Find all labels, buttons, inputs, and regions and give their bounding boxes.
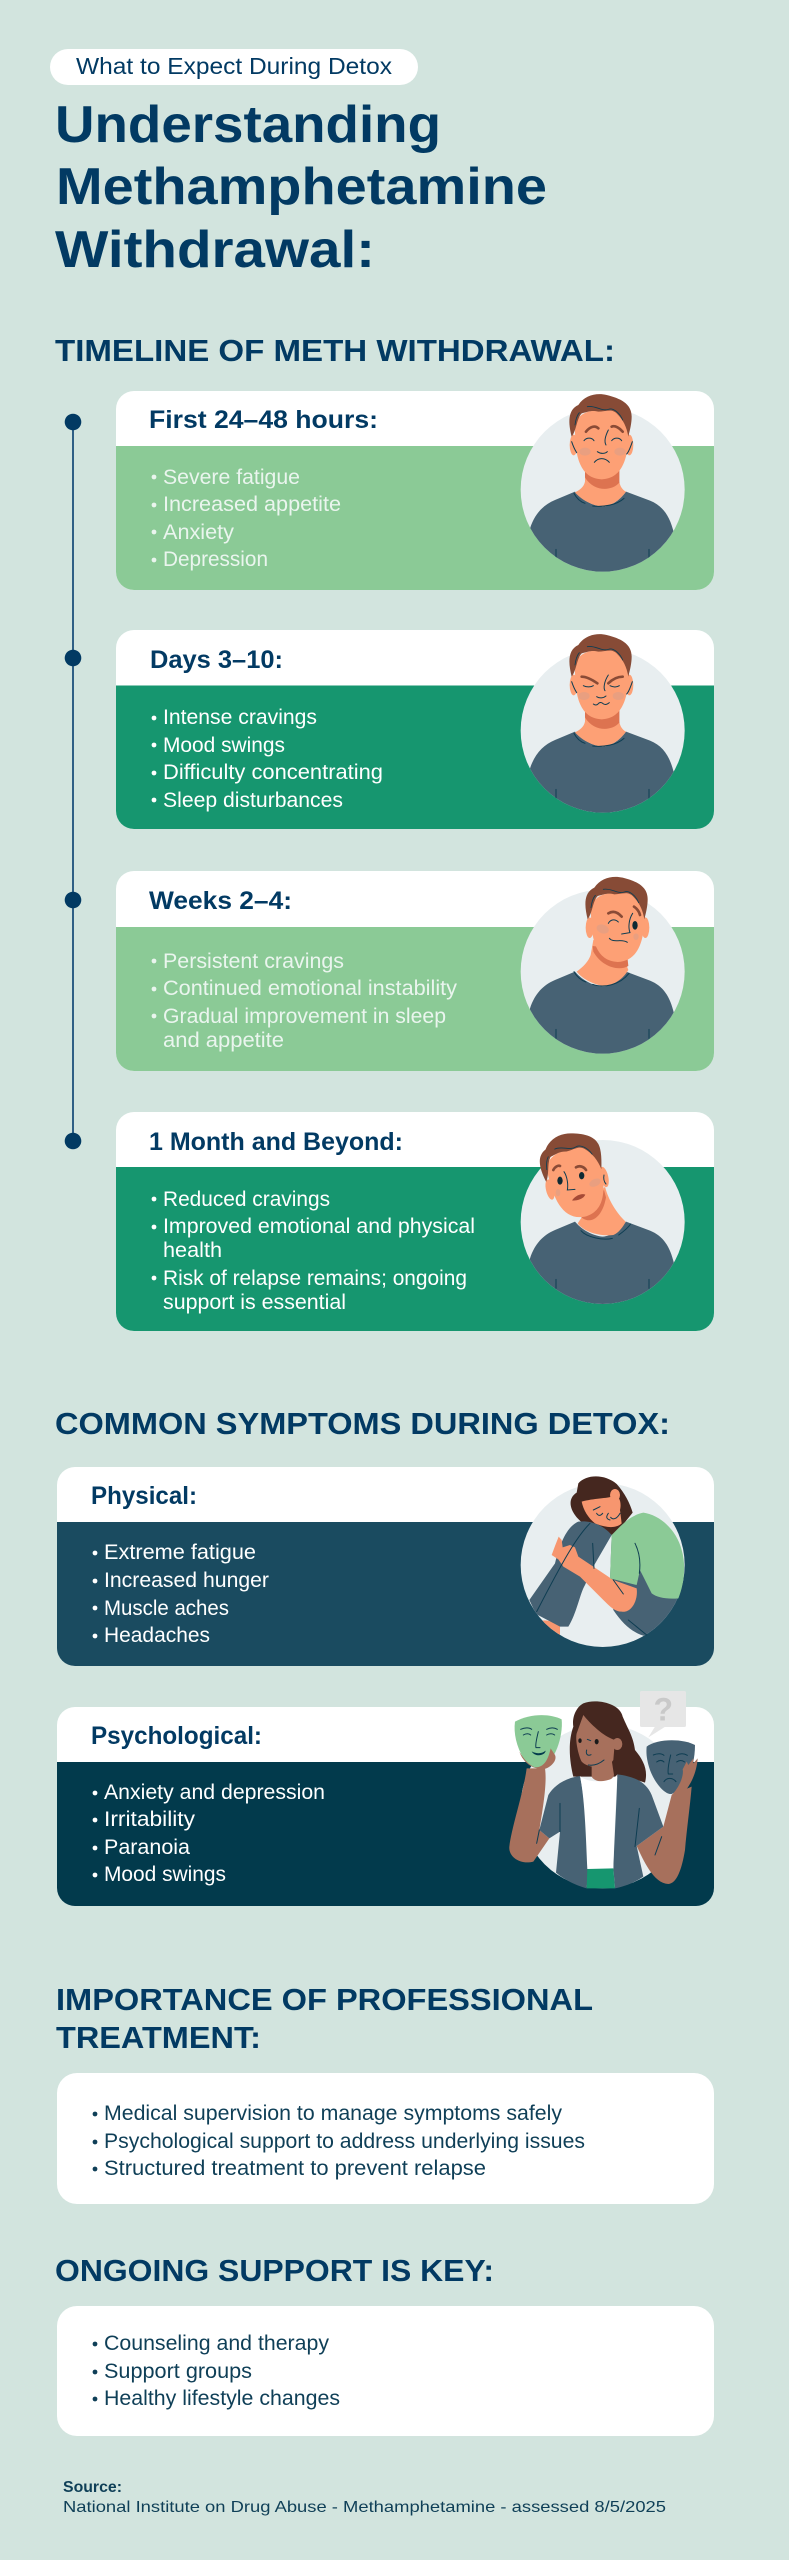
card heading: 1 Month and Beyond: bbox=[149, 1128, 403, 1156]
card heading: Psychological: bbox=[91, 1722, 262, 1750]
bullet list: health bbox=[163, 1239, 222, 1262]
bullet list bbox=[152, 1188, 475, 1314]
source note: Source: bbox=[63, 2479, 122, 2496]
panel: ongoing support list: Counseling and therapy bbox=[104, 2332, 330, 2355]
speech bubble bbox=[640, 1691, 686, 1737]
title bbox=[55, 96, 547, 279]
bullet list: Anxiety bbox=[163, 521, 235, 544]
panel: ongoing support list bbox=[57, 2306, 714, 2436]
title: Understanding bbox=[55, 96, 441, 154]
heading: ongoing support: ONGOING SUPPORT IS KEY: bbox=[55, 2253, 494, 2288]
panel: physical bbox=[57, 1467, 714, 1666]
bullet list: Increased appetite bbox=[163, 493, 341, 516]
icon: woman hugging knees bbox=[521, 1476, 685, 1647]
source note: National Institute on Drug Abuse - Methamphetamine - assessed 8/5/2025 bbox=[63, 2499, 666, 2516]
heading: timeline: TIMELINE OF METH WITHDRAWAL: bbox=[55, 333, 615, 368]
panel: psychological bbox=[57, 1691, 714, 1906]
panel: professional treatment list: Psychological support to address underlying issues bbox=[104, 2130, 585, 2153]
bullet list: and appetite bbox=[163, 1029, 284, 1052]
bullet list: Reduced cravings bbox=[163, 1188, 330, 1211]
panel: days 3-10 bbox=[116, 630, 714, 829]
bullet list: Mood swings bbox=[163, 734, 285, 757]
bullet list: Paranoia bbox=[104, 1836, 190, 1859]
panel: ongoing support list: Support groups bbox=[104, 2360, 252, 2383]
panel: 1 month and beyond bbox=[116, 1112, 714, 1331]
title: Withdrawal: bbox=[55, 221, 375, 279]
card heading: Physical: bbox=[91, 1482, 197, 1510]
bullet list: Severe fatigue bbox=[163, 466, 300, 489]
bullet list: Risk of relapse remains; ongoing bbox=[163, 1267, 467, 1290]
bullet list: Continued emotional instability bbox=[163, 977, 458, 1000]
title: Methamphetamine bbox=[56, 158, 547, 216]
speech bubble: ? bbox=[654, 1692, 673, 1728]
panel: professional treatment list bbox=[57, 2073, 714, 2204]
icon: woman holding masks bbox=[509, 1691, 698, 1888]
icon: worried man bbox=[521, 1127, 685, 1310]
bullet list bbox=[152, 706, 383, 812]
icon: angry man bbox=[521, 634, 685, 820]
heading: importance of professional treatment: IMPORTANCE OF PROFESSIONAL bbox=[56, 1982, 593, 2017]
card heading: Weeks 2–4: bbox=[149, 887, 292, 915]
bullet list bbox=[93, 1541, 269, 1647]
bullet list: Increased hunger bbox=[104, 1569, 269, 1592]
bullet list: Persistent cravings bbox=[163, 950, 344, 973]
panel: first 24-48 hours bbox=[116, 391, 714, 590]
bullet list: Difficulty concentrating bbox=[163, 761, 383, 784]
bullet list: Improved emotional and physical bbox=[163, 1215, 475, 1238]
icon: sad man bbox=[521, 394, 685, 580]
subtitle pill: What to Expect During Detox bbox=[76, 53, 393, 79]
bullet list: Depression bbox=[163, 548, 268, 571]
panel: professional treatment list: Medical supervision to manage symptoms safely bbox=[104, 2102, 562, 2125]
panel: professional treatment list: Structured treatment to prevent relapse bbox=[104, 2157, 486, 2180]
bullet list bbox=[152, 950, 458, 1052]
heading: importance of professional treatment bbox=[56, 1982, 593, 2055]
bullet list: support is essential bbox=[163, 1291, 346, 1314]
source note bbox=[63, 2479, 666, 2516]
card heading: First 24–48 hours: bbox=[149, 406, 378, 434]
card heading: Days 3–10: bbox=[150, 646, 283, 674]
bullet list: Muscle aches bbox=[104, 1597, 229, 1620]
heading: importance of professional treatment: TREATMENT: bbox=[56, 2020, 261, 2055]
bullet list: Mood swings bbox=[104, 1863, 226, 1886]
bullet list: Irritability bbox=[104, 1808, 196, 1831]
bullet list bbox=[152, 466, 341, 571]
subtitle pill bbox=[50, 49, 418, 85]
bullet list: Intense cravings bbox=[163, 706, 317, 729]
panel: ongoing support list: Healthy lifestyle changes bbox=[104, 2387, 340, 2410]
bullet list: Sleep disturbances bbox=[163, 789, 343, 812]
heading: common symptoms: COMMON SYMPTOMS DURING DETOX: bbox=[55, 1406, 670, 1441]
panel: weeks 2-4 bbox=[116, 871, 714, 1071]
bullet list: Headaches bbox=[104, 1624, 210, 1647]
timeline line with dots bbox=[65, 414, 81, 1149]
bullet list: Anxiety and depression bbox=[104, 1781, 325, 1804]
bullet list: Extreme fatigue bbox=[104, 1541, 256, 1564]
icon: winking man bbox=[521, 877, 685, 1060]
bullet list bbox=[93, 1781, 325, 1886]
bullet list: Gradual improvement in sleep bbox=[163, 1005, 446, 1028]
